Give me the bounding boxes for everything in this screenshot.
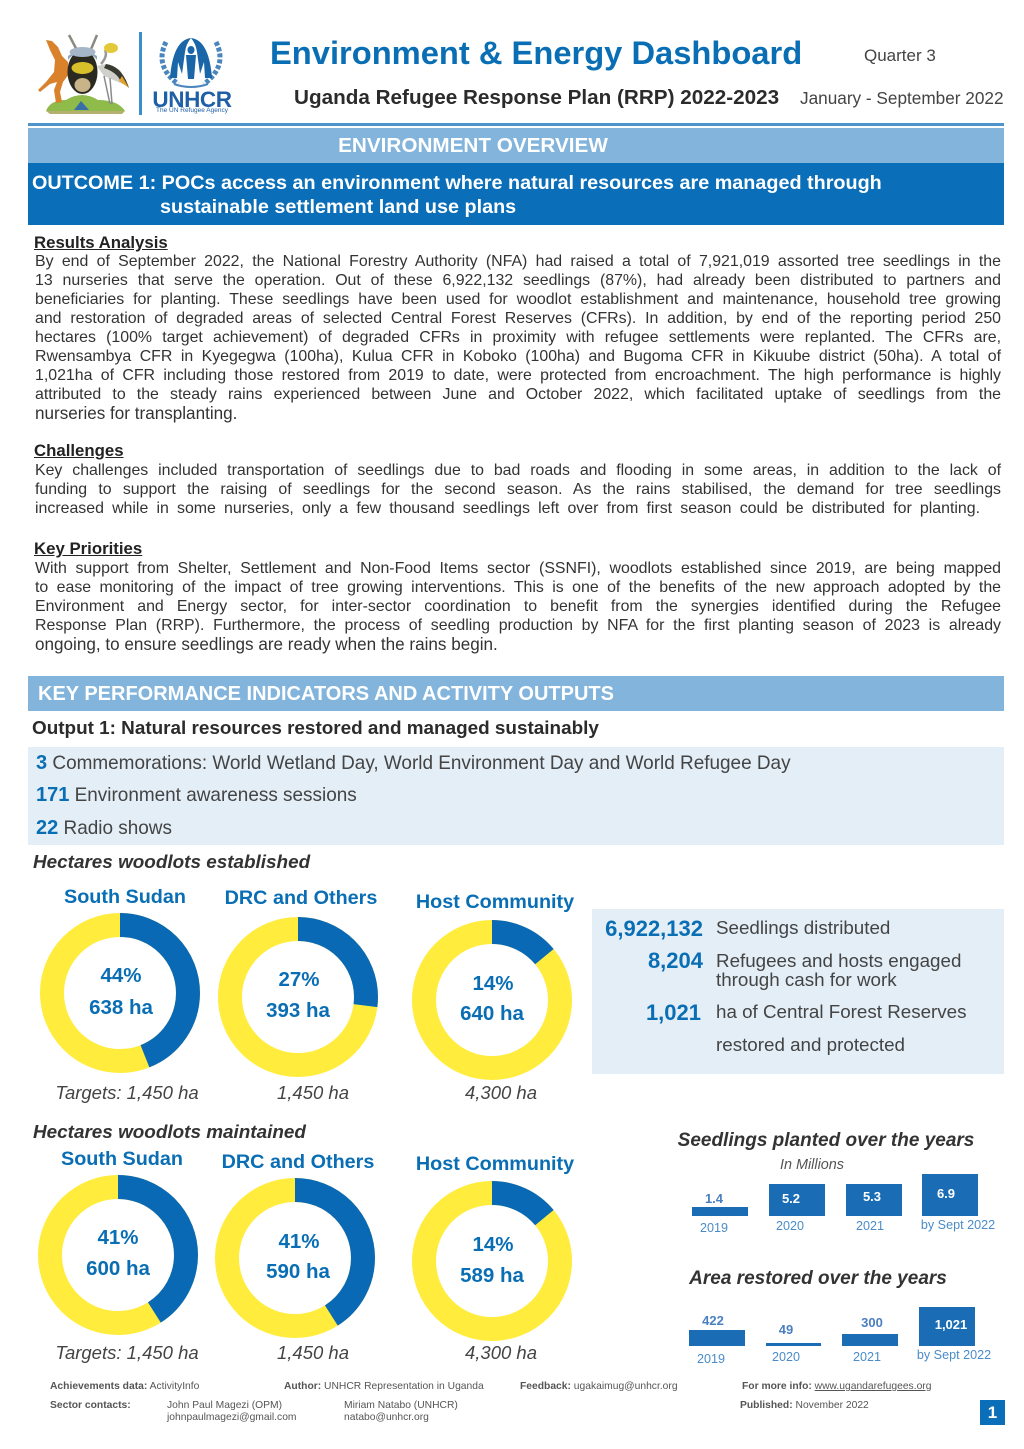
heading: hectares maintained: Hectares woodlots maintained — [33, 1122, 306, 1143]
heading: key priorities: Key Priorities — [34, 539, 142, 558]
footer: Sector contacts: — [50, 1400, 131, 1411]
text block: results analysis: and restoration of degraded areas of selected Central Forest Reserves (CFRs). In addition, by end of the reporting period 250 — [35, 310, 1001, 327]
heading: challenges: Challenges — [34, 441, 124, 460]
donut group: maintained: South Sudan — [61, 1148, 183, 1170]
chart: area restored over the years — [688, 1268, 991, 1366]
donut group: maintained: 589 ha — [460, 1264, 525, 1287]
footer: Achievements data: ActivityInfo — [50, 1381, 199, 1392]
chart: area restored over the years: by Sept 2022 — [917, 1348, 991, 1362]
panel: output counts: 3 Commemorations: World Wetland Day, World Environment Day and World Refugee Day — [36, 752, 791, 774]
donut group: established: 4,300 ha — [465, 1082, 537, 1103]
text block: results analysis: 1,021ha of CFR including those restored from 2019 to date, were protected from encroachment. The high performance is highly — [35, 367, 1001, 384]
chart: area restored over the years: 2021 — [853, 1350, 881, 1364]
donut group: maintained: 41% — [97, 1226, 139, 1249]
panel: key figures: Seedlings distributed — [716, 917, 890, 938]
donut group: established: 14% — [472, 972, 514, 995]
panel: key figures: 1,021 — [646, 1000, 701, 1025]
chart: area restored over the years: 1,021 — [935, 1317, 967, 1332]
text block: results analysis: hectares (100% target achievement) of degraded CFRs in proximity with refugee settlements were replanted. The CFRs are, — [35, 329, 1001, 346]
text block: results analysis: By end of September 2022, the National Forestry Authority (NFA) had raised a total of 7,921,019 assorted tree seedlings in the — [35, 253, 1001, 270]
panel: key figures: 8,204 — [648, 948, 703, 973]
chart: seedlings planted over the years: 1.4 — [705, 1191, 724, 1206]
text block: challenges: increased while in some nurseries, only a few thousand seedlings left over from first season could be distributed for planting. — [35, 500, 980, 517]
header rule — [28, 123, 1004, 126]
donut group: maintained — [38, 1148, 574, 1363]
donut group: maintained: 590 ha — [266, 1260, 331, 1283]
footer: natabo@unhcr.org — [344, 1412, 429, 1423]
footer — [50, 1381, 931, 1423]
chart: seedlings planted over the years: Seedlings planted over the years — [678, 1130, 974, 1151]
chart: area restored over the years: 422 — [702, 1313, 724, 1328]
donut group: maintained: Host Community — [416, 1153, 574, 1175]
text block: key priorities: With support from Shelter, Settlement and Non-Food Items sector (SSNFI), woodlots established since 2019, are being mapped — [35, 560, 1001, 577]
chart: seedlings planted over the years: 2020 — [776, 1219, 804, 1233]
donut group: established: Host Community — [416, 891, 574, 913]
donut group: established: Targets: 1,450 ha — [55, 1082, 199, 1103]
donut group: maintained: 1,450 ha — [277, 1342, 349, 1363]
chart: area restored over the years: Area restored over the years — [688, 1268, 947, 1289]
chart: seedlings planted over the years: 2019 — [700, 1221, 728, 1235]
text block: results analysis: nurseries for transplanting. — [35, 404, 237, 423]
panel: key figures: 6,922,132 — [605, 916, 703, 941]
footer: Author: UNHCR Representation in Uganda — [284, 1381, 484, 1392]
banner: outcome 1 — [28, 163, 1004, 225]
text block: challenges: Key challenges included transportation of seedlings due to bad roads and flooding in some areas, in addition to the lack of — [35, 462, 1001, 479]
donut group: established — [40, 886, 574, 1103]
text block: key priorities — [35, 560, 1001, 654]
chart: seedlings planted over the years: 6.9 — [937, 1186, 955, 1201]
footer: johnpaulmagezi@gmail.com — [167, 1412, 297, 1423]
donut group: maintained: Targets: 1,450 ha — [55, 1342, 199, 1363]
chart: area restored over the years: 2019 — [697, 1352, 725, 1366]
banner: environment overview — [28, 128, 1004, 163]
panel: output counts — [28, 747, 1004, 845]
page number: 1 — [988, 1403, 997, 1422]
text block: key priorities: Environment and Energy sector, for inter-sector coordination to benefit from the synergies identified during the Refugee — [35, 598, 1001, 615]
chart: area restored over the years: 300 — [861, 1315, 883, 1330]
chart: seedlings planted over the years: by Sept 2022 — [921, 1218, 995, 1232]
footer: Feedback: ugakaimug@unhcr.org — [520, 1381, 678, 1392]
chart: area restored over the years: 2020 — [772, 1350, 800, 1364]
banner: environment overview: ENVIRONMENT OVERVIEW — [338, 134, 608, 157]
chart: seedlings planted over the years — [678, 1130, 995, 1235]
panel: key figures: restored and protected — [716, 1034, 905, 1055]
title: Environment & Energy Dashboard — [270, 34, 802, 71]
footer: For more info: www.ugandarefugees.org — [742, 1381, 931, 1392]
logo: Uganda coat of arms — [38, 34, 129, 114]
logo: UNHCR — [152, 38, 232, 114]
heading: results analysis: Results Analysis — [34, 233, 168, 252]
donut group: maintained: DRC and Others — [222, 1151, 374, 1173]
footer: John Paul Magezi (OPM) — [167, 1400, 282, 1411]
chart: area restored over the years: 49 — [779, 1322, 793, 1337]
text block: challenges — [35, 462, 1002, 517]
donut group: maintained: 600 ha — [86, 1257, 151, 1280]
donut group: established: 640 ha — [460, 1002, 525, 1025]
page number — [980, 1400, 1005, 1425]
banner: outcome 1: sustainable settlement land use plans — [160, 196, 516, 218]
text block: key priorities: ongoing, to ensure seedlings are ready when the rains begin. — [35, 635, 498, 654]
text block: results analysis: attributed to the steady rains experienced between June and October 2022, which facilitated uptake of seedlings from the — [35, 386, 1001, 403]
panel: key figures: Refugees and hosts engaged — [716, 950, 961, 971]
panel: output counts: 22 Radio shows — [36, 817, 172, 839]
text block: results analysis — [35, 253, 1002, 423]
donut group: established: 393 ha — [266, 999, 331, 1022]
date range: January - September 2022 — [800, 88, 1004, 108]
donut group: established: 27% — [278, 968, 320, 991]
footer: Published: November 2022 — [740, 1400, 869, 1411]
chart: seedlings planted over the years: In Millions — [780, 1157, 844, 1173]
donut group: maintained: 14% — [472, 1233, 514, 1256]
text block: key priorities: Response Plan (RRP). Furthermore, the process of seedling production by NFA for the first planting season of 2023 is already — [35, 617, 1001, 634]
donut group: established: 638 ha — [89, 996, 154, 1019]
logo: UNHCR: The UN Refugee Agency — [156, 107, 228, 114]
logo divider — [139, 32, 142, 115]
chart: seedlings planted over the years: 5.2 — [782, 1191, 800, 1206]
chart: seedlings planted over the years: 5.3 — [863, 1189, 881, 1204]
subtitle: Uganda Refugee Response Plan (RRP) 2022-2023 — [294, 86, 779, 109]
donut group: established: South Sudan — [64, 886, 186, 908]
donut group: established: 44% — [100, 964, 142, 987]
panel: key figures: ha of Central Forest Reserves — [716, 1001, 967, 1022]
text block: results analysis: Rwensambya CFR in Kyegegwa (100ha), Kulua CFR in Koboko (100ha) and Bugoma CFR in Kikuube district (50ha). A total of — [35, 348, 1001, 365]
banner: key performance indicators: KEY PERFORMANCE INDICATORS AND ACTIVITY OUTPUTS — [38, 683, 614, 705]
heading: output 1: Output 1: Natural resources restored and managed sustainably — [32, 718, 599, 739]
banner: outcome 1: OUTCOME 1: POCs access an environment where natural resources are managed through — [32, 172, 882, 194]
text block: results analysis: 13 nurseries that serve the operation. Out of these 6,922,132 seedlings (87%), had already been distributed to partners and — [35, 272, 1001, 289]
chart: seedlings planted over the years: 2021 — [856, 1219, 884, 1233]
panel: output counts: 171 Environment awareness sessions — [36, 784, 357, 806]
text block: results analysis: beneficiaries for planting. These seedlings have been used for woodlot establishment and maintenance, household tree growing — [35, 291, 1001, 308]
donut group: maintained: 4,300 ha — [465, 1342, 537, 1363]
footer: Miriam Natabo (UNHCR) — [344, 1400, 458, 1411]
heading: hectares established: Hectares woodlots established — [33, 852, 310, 873]
banner: key performance indicators — [28, 676, 1004, 711]
text block: key priorities: to ease monitoring of the impact of tree growing interventions. This is one of the benefits of the new approach adopted by the — [35, 579, 1001, 596]
quarter label: Quarter 3 — [864, 46, 936, 65]
donut group: established: 1,450 ha — [277, 1082, 349, 1103]
logo: UNHCR: UNHCR — [152, 87, 232, 112]
panel: key figures: through cash for work — [716, 969, 897, 990]
panel: key figures — [592, 909, 1004, 1074]
text block: challenges: funding to support the raising of seedlings for the second season. As the rains stabilised, the demand for tree seedlings — [35, 481, 1001, 498]
donut group: established: DRC and Others — [225, 887, 377, 909]
donut group: maintained: 41% — [278, 1230, 320, 1253]
